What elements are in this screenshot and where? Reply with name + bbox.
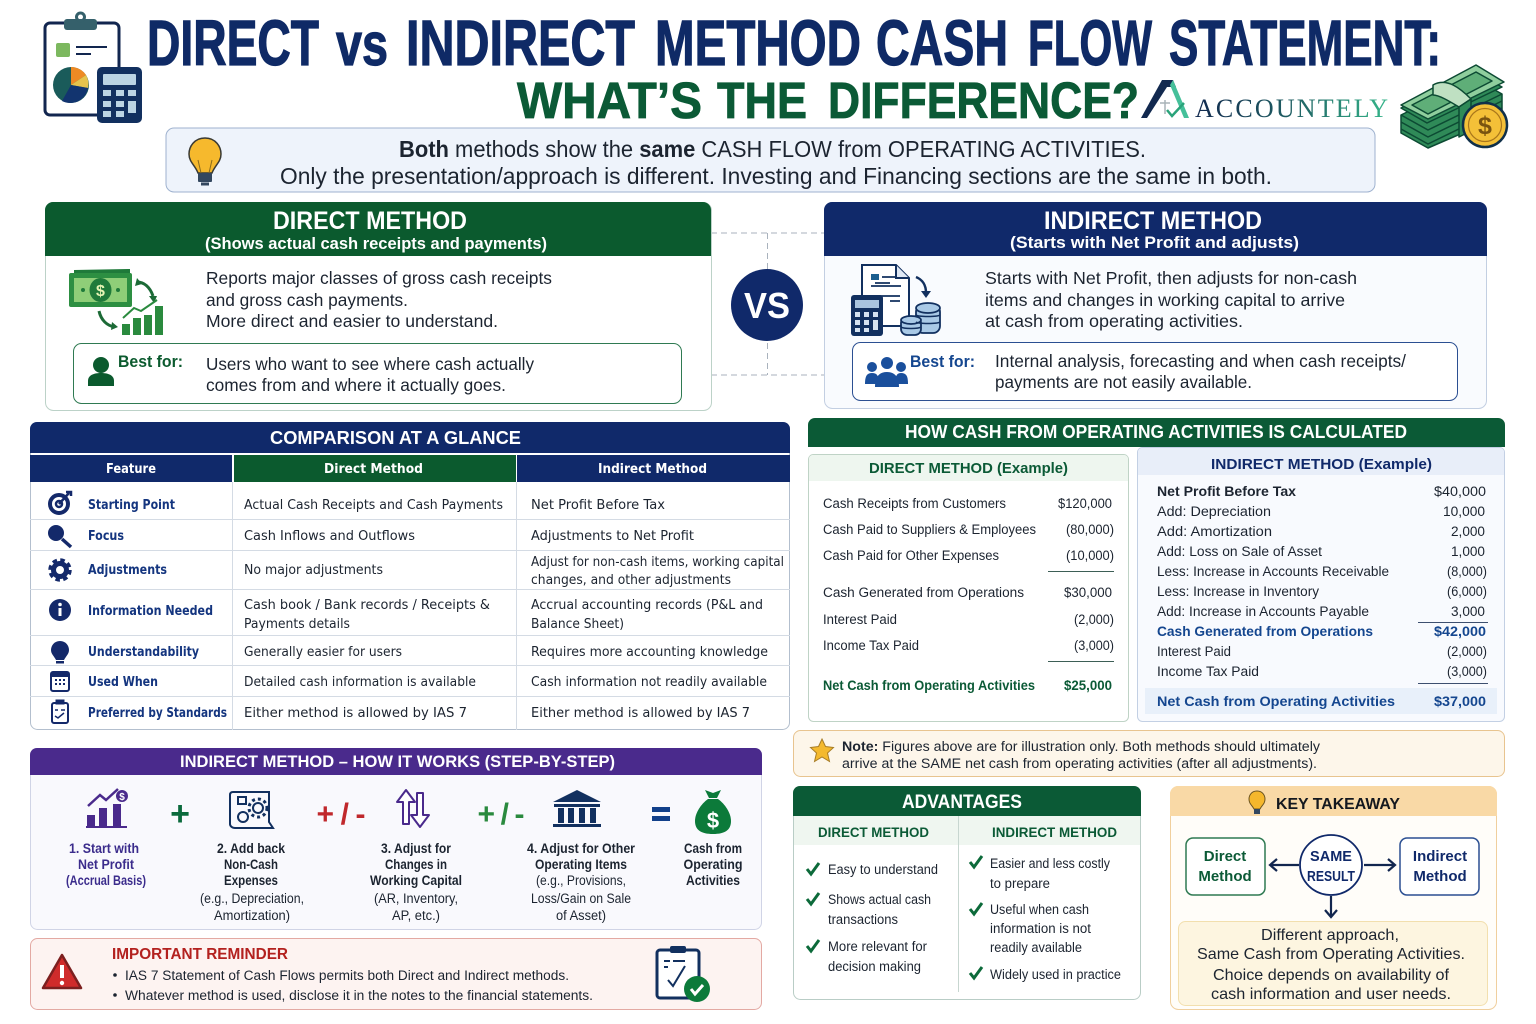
operator: plus: + [170, 795, 190, 833]
card heading: DIRECT METHOD (Example) [869, 460, 1068, 477]
row: used when: Detailed cash information is available [244, 675, 476, 690]
description [206, 268, 552, 331]
direct column: DIRECT METHOD [818, 824, 929, 840]
note callout [794, 730, 1504, 776]
direct column: Easy to understand [828, 862, 938, 877]
example rows: $40,000 [1434, 484, 1486, 499]
panel heading: INDIRECT METHOD – HOW IT WORKS (STEP-BY-STEP) [180, 752, 615, 771]
indirect column: readily available [990, 940, 1082, 955]
example rows: Cash Generated from Operations [1157, 624, 1373, 639]
net cash band [1145, 688, 1497, 714]
row: used when: Cash information not readily available [531, 675, 767, 690]
best for text [206, 354, 534, 395]
row: adjustments: Adjustments [88, 563, 167, 578]
operator: equals [652, 807, 670, 821]
result label [684, 841, 742, 888]
operator: plus minus green: +/- [478, 798, 524, 831]
step label [527, 841, 636, 923]
arrows [1270, 859, 1395, 917]
example rows: (3,000) [1074, 638, 1114, 653]
icon: money stack and coin: $ [1478, 112, 1492, 140]
example rows: (3,000) [1447, 664, 1487, 679]
example rows: 3,000 [1451, 604, 1485, 619]
example rows: Cash Receipts from Customers [823, 496, 1006, 511]
result label: Activities [686, 873, 740, 888]
icon: money stack and coin [1401, 65, 1507, 148]
example rows: Add: Loss on Sale of Asset [1157, 544, 1322, 559]
example rows: Net Cash from Operating Activities [1157, 694, 1395, 709]
icon: expense document with gear [230, 792, 273, 828]
same result circle: RESULT [1307, 869, 1355, 885]
result [684, 790, 742, 888]
title line 2 [517, 72, 1139, 129]
note text: arrive at the SAME net cash from operating activities (after all adjustments). [842, 756, 1317, 771]
title line 2: DIFFERENCE? [828, 72, 1139, 129]
example rows: 2,000 [1451, 524, 1485, 539]
direct column: transactions [828, 912, 898, 927]
direct column [807, 824, 938, 974]
indirect column: Useful when cash [990, 902, 1089, 917]
row: information needed: Information Needed [88, 604, 213, 619]
row: focus: Focus [88, 529, 124, 544]
title line 2: WHAT’S [517, 72, 702, 129]
row: understandability: Understandability [88, 645, 199, 660]
table: comparison at a glance [30, 422, 790, 730]
icon: warning triangle [43, 955, 81, 988]
row: used when [51, 672, 767, 691]
best for text: comes from and where it actually goes. [206, 375, 506, 395]
connector lines [711, 233, 824, 375]
step label [66, 841, 146, 888]
example rows: Add: Amortization [1157, 524, 1272, 539]
row: used when: Used When [88, 675, 158, 690]
row: starting point: Net Profit Before Tax [531, 498, 665, 513]
step label: 3. Adjust for [381, 841, 452, 856]
table header row [30, 455, 790, 482]
row: preferred by standards: Either method is allowed by IAS 7 [244, 706, 467, 721]
row: starting point: Actual Cash Receipts and Cash Payments [244, 498, 503, 513]
description: and gross cash payments. [206, 290, 408, 310]
takeaway text: cash information and user needs. [1211, 986, 1451, 1003]
box: direct method: Direct [1204, 848, 1246, 865]
best for label: Best for: [910, 352, 975, 371]
icon: calendar [51, 672, 69, 691]
description [985, 268, 1357, 331]
card heading: INDIRECT METHOD (Example) [1211, 456, 1432, 473]
step label: 2. Add back [217, 841, 285, 856]
icon: clipboard check [657, 946, 710, 1002]
subheading: (Starts with Net Profit and adjusts) [1010, 233, 1299, 252]
step label: Net Profit [78, 857, 134, 872]
step label: (e.g., Depreciation, [200, 891, 304, 906]
result label: Operating [684, 857, 742, 872]
table header row: Feature [106, 461, 156, 477]
best for box [852, 342, 1458, 400]
reminder bullets: Whatever method is used, disclose it in the notes to the financial statements. [125, 988, 593, 1003]
heading: DIRECT METHOD [273, 207, 467, 235]
step label: Changes in [385, 857, 447, 872]
icon: document, calculator and coins [851, 265, 940, 336]
takeaway text: Choice depends on availability of [1213, 967, 1450, 984]
same result circle: SAME [1310, 849, 1352, 865]
title line 1: DIRECT [147, 7, 319, 79]
step label [200, 841, 304, 923]
note text: Note: Figures above are for illustration only. Both methods should ultimately [842, 739, 1320, 754]
indirect column: Widely used in practice [990, 967, 1121, 982]
example rows: Add: Increase in Accounts Payable [1157, 604, 1369, 619]
icon: money bag: $ [707, 808, 719, 833]
row: preferred by standards [52, 700, 750, 723]
example rows: Interest Paid [823, 612, 897, 627]
example rows [823, 496, 1114, 693]
box: indirect method [1400, 838, 1479, 895]
step label: (AR, Inventory, [374, 891, 458, 906]
row: information needed [49, 598, 763, 632]
example rows: Net Profit Before Tax [1157, 484, 1297, 499]
step label: 1. Start with [69, 841, 139, 856]
icon: cash and chart [69, 269, 163, 335]
panel: how the indirect method works [30, 748, 762, 930]
operator: plus minus red: +/- [316, 798, 366, 831]
panel: direct method [45, 202, 712, 410]
step label: Operating Items [535, 857, 627, 872]
example rows: 1,000 [1451, 544, 1485, 559]
card: indirect example [1138, 448, 1504, 722]
callout: same cash flow [166, 128, 1375, 192]
direct column: Shows actual cash [828, 892, 931, 907]
row: focus [48, 525, 694, 547]
table header row: Indirect Method [598, 461, 707, 477]
panel title: HOW CASH FROM OPERATING ACTIVITIES IS CALCULATED [905, 422, 1407, 442]
takeaway text [1178, 922, 1488, 1006]
best for text: Internal analysis, forecasting and when cash receipts/ [995, 351, 1406, 371]
icon: info [49, 599, 71, 621]
description: More direct and easier to understand. [206, 311, 498, 331]
step label: of Asset) [556, 908, 606, 923]
step label: Loss/Gain on Sale [531, 891, 631, 906]
heading: INDIRECT METHOD [1044, 207, 1262, 235]
logo: Accountely [1141, 80, 1388, 123]
title line 2: THE [717, 72, 807, 129]
example rows: (80,000) [1066, 522, 1114, 537]
row: information needed: Cash book / Bank records / Receipts & [244, 598, 490, 613]
heading: KEY TAKEAWAY [1276, 796, 1400, 813]
indirect column: Easier and less costly [990, 856, 1110, 871]
step label: Working Capital [370, 873, 462, 888]
icon: checklist [52, 700, 68, 723]
icon: magnifier [48, 525, 71, 547]
row: adjustments: Adjust for non-cash items, working capital [531, 555, 784, 570]
step 1 [66, 789, 146, 888]
panel: important reminder [30, 938, 762, 1010]
example rows: (10,000) [1066, 548, 1114, 563]
step label: Expenses [224, 873, 278, 888]
row: starting point [50, 492, 665, 513]
same result circle [1300, 835, 1362, 895]
row: information needed: Balance Sheet) [531, 617, 624, 632]
step 4 [527, 790, 636, 923]
example rows: $25,000 [1064, 678, 1112, 693]
icon: star [810, 739, 834, 762]
card: direct example [808, 454, 1128, 722]
panel: advantages [793, 786, 1141, 1000]
row: adjustments [50, 555, 784, 588]
icon: clipboard with calculator [45, 13, 142, 123]
VS badge: VS [744, 285, 790, 326]
callout line 2: Only the presentation/approach is different. Investing and Financing sections are the same in both. [280, 163, 1272, 189]
panel: how cash from operating activities is calculated [808, 418, 1505, 722]
indirect column: information is not [990, 921, 1091, 936]
icon: target [50, 492, 71, 513]
VS badge [731, 269, 803, 341]
example rows: (2,000) [1074, 612, 1114, 627]
icon: people [865, 357, 908, 387]
step label [370, 841, 462, 923]
best for box [74, 344, 682, 404]
reminder bullets: IAS 7 Statement of Cash Flows permits both Direct and Indirect methods. [125, 968, 569, 983]
step label: Amortization) [214, 908, 290, 923]
row: focus: Cash Inflows and Outflows [244, 529, 415, 544]
indirect column: to prepare [990, 876, 1050, 891]
best for text: payments are not easily available. [995, 372, 1252, 392]
example rows [1157, 484, 1488, 709]
row: information needed: Accrual accounting records (P&L and [531, 598, 763, 613]
step label: 4. Adjust for Other [527, 841, 636, 856]
logo: Accountely: ACCOUNTELY [1195, 94, 1388, 123]
example rows: $42,000 [1434, 624, 1486, 639]
icon: gear [50, 560, 70, 580]
description: items and changes in working capital to arrive [985, 290, 1345, 310]
direct column: More relevant for [828, 939, 927, 954]
example rows: Add: Depreciation [1157, 504, 1271, 519]
step label: Non-Cash [224, 857, 278, 872]
title line 1: CASH [876, 7, 1008, 79]
example rows: Income Tax Paid [1157, 664, 1259, 679]
table title: COMPARISON AT A GLANCE [270, 427, 521, 448]
takeaway text: Same Cash from Operating Activities. [1197, 946, 1465, 963]
callout line 1: Both methods show the same CASH FLOW from OPERATING ACTIVITIES. [399, 136, 1146, 162]
row: understandability [51, 641, 768, 664]
example rows: Less: Increase in Accounts Receivable [1157, 564, 1389, 579]
example rows: Less: Increase in Inventory [1157, 584, 1319, 599]
description: Reports major classes of gross cash receipts [206, 268, 552, 288]
best for text: Users who want to see where cash actually [206, 354, 534, 374]
box: indirect method: Indirect [1413, 848, 1467, 865]
table header row: Direct Method [324, 461, 423, 477]
result label: Cash from [684, 841, 742, 856]
row: starting point: Starting Point [88, 498, 175, 513]
row: information needed: Payments details [244, 617, 350, 632]
icon: growth chart: $ [119, 792, 125, 803]
panel: key takeaway [1170, 786, 1497, 1010]
title line 1: METHOD [655, 7, 861, 79]
example rows: Cash Paid to Suppliers & Employees [823, 522, 1036, 537]
icon: bank [553, 790, 601, 827]
description: at cash from operating activities. [985, 311, 1243, 331]
title line 1: INDIRECT [406, 7, 635, 79]
example rows: $120,000 [1058, 496, 1112, 511]
subheading: (Shows actual cash receipts and payments) [205, 234, 547, 253]
row: focus: Adjustments to Net Profit [531, 529, 694, 544]
step label: (e.g., Provisions, [536, 873, 626, 888]
box: indirect method: Method [1413, 868, 1467, 885]
icon: person [88, 357, 114, 386]
title line 1 [147, 7, 1441, 79]
example rows: Cash Paid for Other Expenses [823, 548, 999, 563]
icon: bulb [51, 641, 69, 664]
indirect column: INDIRECT METHOD [992, 824, 1117, 840]
icon: cash and chart: $ [96, 283, 105, 300]
example rows: Income Tax Paid [823, 638, 919, 653]
icon: bulb [1249, 791, 1265, 814]
note text [842, 739, 1320, 771]
icon: up and down arrows [397, 790, 429, 827]
takeaway text: Different approach, [1261, 927, 1399, 944]
heading: ADVANTAGES [902, 792, 1022, 813]
example rows: (8,000) [1447, 564, 1487, 579]
best for text [995, 351, 1406, 392]
icon: light bulb [189, 138, 221, 184]
panel: indirect method [824, 202, 1487, 408]
indirect column [970, 824, 1121, 982]
box: direct method: Method [1198, 868, 1252, 885]
example rows: Net Cash from Operating Activities [823, 678, 1035, 693]
row: adjustments: No major adjustments [244, 563, 383, 578]
row: understandability: Requires more accounting knowledge [531, 645, 768, 660]
example rows: Cash Generated from Operations [823, 585, 1024, 600]
title line 1: vs [336, 11, 388, 78]
example rows: $30,000 [1064, 585, 1112, 600]
row: preferred by standards: Preferred by Standards [88, 706, 227, 721]
reminder bullets [113, 968, 593, 1003]
best for label: Best for: [118, 352, 183, 371]
example rows: (2,000) [1447, 644, 1487, 659]
box: direct method [1186, 838, 1265, 895]
example rows: Interest Paid [1157, 644, 1231, 659]
example rows: (6,000) [1447, 584, 1487, 599]
description: Starts with Net Profit, then adjusts for non-cash [985, 268, 1357, 288]
step label: AP, etc.) [392, 908, 440, 923]
example rows: 10,000 [1443, 504, 1485, 519]
direct column: decision making [828, 959, 921, 974]
step label: (Accrual Basis) [66, 873, 146, 888]
step 2 [200, 792, 304, 923]
step 3 [370, 790, 462, 923]
row: adjustments: changes, and other adjustments [531, 573, 731, 588]
row: understandability: Generally easier for users [244, 645, 402, 660]
row: preferred by standards: Either method is allowed by IAS 7 [531, 706, 750, 721]
title line 1: FLOW [1028, 7, 1152, 79]
reminder heading: IMPORTANT REMINDER [112, 946, 288, 963]
example rows: $37,000 [1434, 694, 1486, 709]
